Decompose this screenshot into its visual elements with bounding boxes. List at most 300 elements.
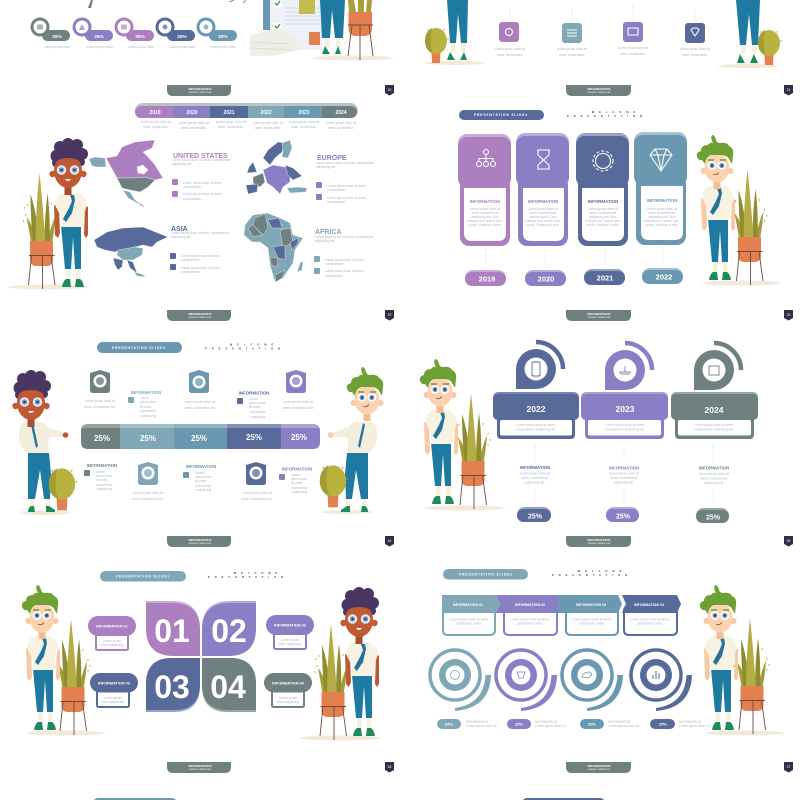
- panel: arrow boxes: INFORMATION 02: [515, 603, 545, 607]
- percent row: slide 27: Lorem ipsum dolor sit: [679, 724, 710, 728]
- footers and page numbers: BUSINESS COMPANY HERE: [189, 768, 212, 771]
- footers and page numbers: [167, 85, 793, 773]
- panel: card 2022: adipiscing elit. Duis: [648, 215, 676, 219]
- info and percent: 2023: [606, 466, 639, 522]
- badges: slide 24: Lorem ipsum dolor sit: [242, 491, 272, 495]
- panel: card 2022: [634, 132, 687, 245]
- year pills: slide 23: [465, 268, 683, 286]
- heading: slide 27: WELCOME: [578, 569, 626, 573]
- footers and page numbers: BUSINESS COMPANY HERE: [588, 91, 611, 94]
- icon: gear: [593, 151, 613, 171]
- info and percent: 2024: adipiscing elit.: [704, 481, 724, 485]
- text block: united states: Lorem ipsum dolor sit amet, consectetuer: [172, 158, 231, 162]
- text block: united states: [172, 153, 231, 201]
- label: information 01: dolor adipiscing: [101, 643, 123, 647]
- text block: africa: Lorem ipsum dolor sit amet,: [325, 269, 364, 273]
- character with cactus: slide 24 right: [320, 367, 384, 514]
- panel: card 2019: amet, consectetuer: [471, 211, 499, 215]
- panel: card 2019: adipiscing elit. Duis: [471, 215, 499, 219]
- percent row: slide 27: 25%: [515, 722, 523, 726]
- panel: arrow boxes: consectetur lorem.: [456, 622, 482, 626]
- percent row: slide 27: INFORMATION: [535, 720, 558, 724]
- information blocks: slide 24: r adipiscing: [96, 487, 112, 491]
- text block: africa: consectetuer.: [325, 262, 344, 266]
- text block: africa: AFRICA: [315, 229, 341, 236]
- panel: slide 22 timeline: amet, consectetur.: [255, 126, 281, 130]
- panel: year 2023: 2023: [616, 404, 635, 414]
- info and percent: 2022: Lorem ipsum dolor sit: [520, 472, 550, 476]
- footers and page numbers: 24: [388, 539, 391, 543]
- text block: africa: adipiscing elit.: [315, 239, 335, 243]
- info and percent: 2024: INFORMATION: [699, 466, 729, 470]
- year pills: slide 23: 2021: [597, 274, 613, 282]
- text block: europe: Lorem ipsum dolor sit amet,: [327, 196, 366, 200]
- information blocks: slide 24: INFORMATION: [186, 464, 216, 469]
- panel: slide 22 timeline: 2022: [260, 110, 272, 116]
- information blocks: slide 24: INFORMATION: [282, 466, 312, 472]
- character with plant: slide 25: [420, 359, 505, 510]
- panel: card 2020: Lorem ipsum dolor sit: [528, 207, 558, 211]
- footers and page numbers: INFOGRAPHICS: [188, 764, 212, 768]
- information blocks: slide 24: r adipiscing: [195, 488, 211, 492]
- panel: card 2021: amet, consectetuer: [589, 211, 617, 215]
- footers and page numbers: 20: [388, 88, 391, 92]
- text block: united states: UNITED STATES: [173, 153, 228, 160]
- panel: year 2023: Lorem ipsum dolor sit amet,: [605, 423, 645, 427]
- text block: asia: Lorem ipsum dolor sit amet,: [181, 266, 220, 270]
- text block: europe: consectetuer.: [327, 188, 346, 192]
- illustration: documents, legs and plant: [250, 0, 393, 60]
- label: information 04: [264, 673, 312, 708]
- year pills: slide 23: 2020: [538, 274, 554, 284]
- panel: year 2022: consectetuer adipiscing elit.: [516, 428, 556, 432]
- label: information 03: INFORMATION 03: [98, 682, 130, 686]
- info and percent: 2023: INFORMATION: [609, 466, 639, 470]
- information blocks: slide 24: consectetur: [291, 486, 308, 490]
- badges: slide 24: amet, consectetur elit.: [84, 405, 116, 409]
- chart: segmented percentage bar: 25%: [140, 434, 156, 443]
- panel: card 2020: tristique nec, auctor quis,: [525, 219, 561, 223]
- info and percent: 2024: 25%: [706, 514, 721, 522]
- panel: slide 21 icon row: amet, consectetur.: [559, 53, 585, 57]
- footers and page numbers: 21: [787, 88, 790, 92]
- year pills: slide 23: 2019: [479, 274, 495, 284]
- information blocks: slide 24: Lorem: [249, 397, 258, 401]
- panel: card 2020: adipiscing elit. Duis: [529, 215, 557, 219]
- info and percent: 2022: INFORMATION: [520, 465, 550, 470]
- panel: slide 22 timeline: 2020: [186, 110, 198, 116]
- information blocks: slide 24: Lorem: [140, 396, 149, 400]
- information blocks: slide 24: INFORMATION: [239, 390, 269, 396]
- label: information 02: dolor adipiscing: [279, 642, 301, 646]
- chart: segmented percentage bar: [81, 424, 320, 449]
- panel: slide 21 icon row: amet, consectetur.: [497, 53, 523, 57]
- footers and page numbers: 22: [388, 313, 391, 317]
- pill item blue: Lorem ipsum dolor: [210, 45, 237, 49]
- information blocks: slide 24: ipsum dolor: [249, 401, 266, 405]
- petal chart: 01 to 04: 01: [154, 613, 190, 649]
- footers and page numbers: INFOGRAPHICS: [188, 87, 212, 91]
- pill item blue: [196, 18, 237, 49]
- text block: africa: Lorem ipsum dolor sit amet, consectetuer: [315, 235, 374, 239]
- text block: europe: Lorem ipsum dolor sit amet,: [327, 184, 366, 188]
- panel: card 2021: Lorem ipsum dolor sit: [588, 207, 618, 211]
- info and percent: 2023: 25%: [616, 514, 631, 520]
- information blocks: slide 24: r adipiscing: [249, 415, 265, 419]
- text block: africa: consectetuer.: [325, 274, 344, 278]
- text block: asia: [170, 226, 230, 274]
- panel: card 2020: [516, 133, 569, 246]
- text block: asia: consectetuer.: [181, 270, 200, 274]
- panel: card 2019: Lorem ipsum dolor sit: [470, 207, 500, 211]
- panel: year 2024: [671, 343, 758, 439]
- panel: slide 22 timeline: 2021: [223, 110, 235, 116]
- info and percent: 2023: adipiscing elit.: [614, 480, 634, 484]
- character with plant: slide 26 right: [300, 587, 380, 740]
- text block: asia: Lorem ipsum dolor sit amet,: [181, 254, 220, 258]
- footers and page numbers: INFOGRAPHICS: [188, 312, 212, 316]
- percent row: slide 27: 25%: [445, 722, 453, 726]
- label: information 01: INFORMATION 01: [96, 624, 128, 628]
- info and percent: 2022: [517, 465, 551, 522]
- panel: card 2022: amet, consectetuer: [648, 211, 676, 215]
- percent row: slide 27: Lorem ipsum dolor sit: [608, 724, 639, 728]
- footers and page numbers: INFOGRAPHICS: [188, 538, 212, 542]
- panel: year 2024: 2024: [705, 405, 724, 415]
- information blocks: slide 24: ipsum dolor: [96, 474, 113, 478]
- panel: slide 21 icon row: Lorem ipsum dolor sit: [680, 47, 710, 51]
- panel: slide 22 timeline: amet, consectetur.: [291, 125, 317, 129]
- panel: slide 22 timeline: [135, 103, 358, 130]
- character with cactus: slide 24 left: [12, 370, 77, 515]
- footers and page numbers: INFOGRAPHICS: [587, 764, 611, 768]
- chart: segmented percentage bar: 25%: [291, 433, 307, 442]
- label: information 03: [90, 673, 138, 708]
- panel: slide 22 timeline: Lorem ipsum dolor sit: [253, 121, 283, 125]
- panel: slide 22 timeline: amet, consectetur.: [143, 125, 169, 129]
- chart: segmented percentage bar: 25%: [246, 433, 262, 442]
- footers and page numbers: BUSINESS COMPANY HERE: [189, 542, 212, 545]
- text block: africa: [314, 229, 374, 278]
- chart: segmented percentage bar: 25%: [94, 434, 110, 443]
- badges: slide 24: amet, consectetur elit.: [132, 497, 164, 501]
- panel: card 2021: adipiscing elit. Duis: [589, 215, 617, 219]
- illustration: slide 21 right legs and cactus: [718, 0, 782, 68]
- badges: slide 24: amet, consectetur elit.: [184, 406, 216, 410]
- text block: united states: consectetuer.: [183, 185, 202, 189]
- information blocks: slide 24: consectetur: [96, 483, 113, 487]
- panel: year 2024: consectetuer adipiscing elit.: [694, 428, 734, 432]
- text block: united states: consectetuer.: [183, 197, 202, 201]
- information blocks: slide 24: consectetur: [249, 410, 266, 414]
- label: information 04: INFORMATION 04: [272, 682, 305, 686]
- footers and page numbers: BUSINESS COMPANY HERE: [588, 542, 611, 545]
- label: information 03: Lorem ipsum: [104, 696, 123, 700]
- information blocks: slide 24: sit amet,: [291, 481, 303, 485]
- text block: united states: adipiscing elit.: [172, 162, 192, 166]
- heading: slide 26: PRESENTATION SLIDEs: [116, 574, 170, 578]
- illustration: slide 21 left legs and cactus: [425, 0, 485, 65]
- panel: arrow boxes: consectetur lorem.: [579, 622, 605, 626]
- panel: slide 22 timeline: Lorem ipsum dolor sit: [289, 120, 319, 124]
- panel: arrow boxes: INFORMATION 01: [453, 603, 483, 607]
- information blocks: slide 24: ipsum dolor: [140, 400, 157, 404]
- panel: slide 22 timeline: amet, consectetur.: [181, 126, 207, 130]
- character with plant: slide 23: [697, 135, 780, 286]
- panel: year 2022: 2022: [527, 404, 546, 414]
- badges: slide 24: amet, consectetur elit.: [282, 406, 314, 410]
- heading: slide 26: WELCOME: [234, 571, 282, 575]
- heading: slide 24: PRESENTATION: [205, 346, 285, 350]
- heading: slide 23: [459, 110, 647, 120]
- panel: card 2021: [576, 133, 629, 246]
- panel: arrow boxes: Lorem ipsum dolor sit amet,: [449, 618, 489, 622]
- panel: arrow boxes: [442, 595, 681, 636]
- panel: card 2019: INFORMATION: [470, 199, 500, 204]
- percent row: slide 27: Lorem ipsum dolor sit: [466, 724, 497, 728]
- heading: slide 24: PRESENTATION SLIDEs: [112, 346, 166, 350]
- percent row: slide 27: INFORMATION: [679, 720, 702, 724]
- map: europe: [246, 140, 307, 194]
- heading: slide 26: PRESENTATION: [208, 575, 288, 579]
- radial icon 1: [430, 650, 491, 711]
- panel: arrow boxes: consectetur lorem.: [637, 622, 663, 626]
- pill item violet: 25%: [135, 34, 146, 40]
- badges: slide 24: Lorem ipsum dolor sit: [133, 491, 163, 495]
- badges: slide 24: Lorem ipsum dolor sit: [185, 400, 215, 404]
- next slide pill tops: [93, 798, 605, 800]
- panel: card 2019: [458, 134, 511, 246]
- pill item purple: Lorem ipsum dolor: [87, 45, 114, 49]
- panel: slide 22 timeline: amet, consectetur.: [218, 125, 244, 129]
- information blocks: slide 24: r adipiscing: [291, 490, 307, 494]
- panel: year 2023: consectetuer adipiscing elit.: [605, 428, 645, 432]
- text block: europe: Lorem ipsum dolor sit amet, consectetuer: [316, 161, 375, 165]
- heading: slide 27: PRESENTATION SLIDEs: [459, 572, 513, 576]
- info and percent: 2024: Lorem ipsum dolor sit: [699, 472, 729, 476]
- footers and page numbers: 25: [787, 539, 790, 543]
- heading: slide 23: WELCOME: [592, 110, 640, 114]
- footers and page numbers: INFOGRAPHICS: [587, 87, 611, 91]
- panel: arrow boxes: Lorem ipsum dolor sit amet,: [630, 618, 670, 622]
- panel: arrow boxes: INFORMATION 03: [576, 603, 606, 607]
- pill item violet: [114, 18, 155, 49]
- information blocks: slide 24: ipsum dolor: [291, 477, 308, 481]
- info and percent: 2023: Lorem ipsum dolor sit: [609, 472, 639, 476]
- percent row: slide 27: 25%: [588, 722, 596, 726]
- heading: slide 26: [100, 571, 288, 582]
- icon: diamond: [650, 149, 672, 171]
- information blocks: slide 24: sit amet,: [195, 479, 207, 483]
- pill item gray: 25%: [52, 34, 63, 40]
- text block: asia: adipiscing elit.: [171, 235, 191, 239]
- panel: year 2022: Lorem ipsum dolor sit amet,: [516, 423, 556, 427]
- footers and page numbers: BUSINESS COMPANY HERE: [189, 316, 212, 319]
- information blocks: slide 24: ipsum dolor: [195, 475, 212, 479]
- panel: card 2020: purus. Vivamus id sem.: [526, 223, 560, 227]
- footers and page numbers: 23: [787, 313, 790, 317]
- information blocks: slide 24: consectetur: [140, 409, 157, 413]
- label: information 01: Lorem ipsum: [103, 639, 122, 643]
- heading: slide 24: [97, 342, 285, 353]
- heading: slide 23: PRESENTATION SLIDEs: [474, 113, 528, 117]
- information blocks: slide 24: [84, 390, 312, 494]
- heading: slide 27: [443, 569, 632, 580]
- panel: slide 22 timeline: amet, consectetur.: [328, 126, 354, 130]
- character with plant: slide 22: [8, 138, 88, 290]
- pill item blue: 25%: [218, 34, 229, 40]
- badges: slide 24: Lorem ipsum dolor sit: [283, 400, 313, 404]
- icon: diamond: [685, 23, 705, 43]
- chart: segmented percentage bar: 25%: [191, 434, 207, 443]
- info and percent: 2023: amet, consectetuer: [610, 476, 638, 480]
- icon: folder: [623, 22, 643, 42]
- panel: slide 22 timeline: Lorem ipsum dolor sit: [216, 120, 246, 124]
- text block: africa: Lorem ipsum dolor sit amet,: [325, 258, 364, 262]
- badges: slide 24: Lorem ipsum dolor sit: [85, 399, 115, 403]
- label: information 03: dolor adipiscing: [102, 700, 124, 704]
- information blocks: slide 24: Lorem: [195, 471, 204, 475]
- panel: arrow boxes: consectetur lorem.: [517, 622, 543, 626]
- icon: hierarchy: [476, 150, 496, 166]
- info and percent: 2022: 25%: [528, 514, 543, 520]
- panel: slide 20 percent row: [30, 0, 246, 49]
- pill item gray: [30, 18, 71, 49]
- panel: arrow boxes: Lorem ipsum dolor sit amet,: [572, 618, 612, 622]
- panel: card 2020: INFORMATION: [528, 199, 558, 204]
- panel: slide 22 timeline: 2023: [298, 110, 310, 116]
- heading: slide 23: PRESENTATION: [567, 114, 647, 118]
- panel: slide 21 icon row: Lorem ipsum dolor sit: [618, 46, 648, 50]
- panel: year 2022: [493, 342, 579, 439]
- petal chart: 01 to 04: 02: [211, 613, 247, 649]
- panel: card 2021: tristique nec, auctor quis,: [585, 219, 621, 223]
- panel: slide 22 timeline: 2019: [149, 110, 161, 116]
- info and percent: 2024: [696, 466, 729, 523]
- information blocks: slide 24: r adipiscing: [140, 414, 156, 418]
- panel: card 2019: purus. Vivamus id sem.: [468, 223, 502, 227]
- text block: asia: consectetuer.: [181, 258, 200, 262]
- info and percent: 2022: amet, consectetuer: [521, 476, 549, 480]
- percent row: slide 27: INFORMATION: [608, 720, 631, 724]
- information blocks: slide 24: Lorem: [291, 473, 300, 477]
- information blocks: slide 24: sit amet,: [96, 478, 108, 482]
- petal chart: 01 to 04: [146, 601, 256, 712]
- information blocks: slide 24: Lorem: [96, 470, 105, 474]
- footers and page numbers: 27: [787, 765, 790, 769]
- petal chart: 01 to 04: 03: [154, 669, 190, 705]
- information blocks: slide 24: consectetur: [195, 484, 212, 488]
- panel: slide 21 icon row: amet, consectetur.: [682, 53, 708, 57]
- text block: europe: EUROPE: [317, 155, 347, 162]
- map: asia: [94, 227, 168, 277]
- panel: slide 21 icon row: amet, consectetur.: [620, 52, 646, 56]
- character with plant: slide 26 left: [22, 585, 105, 736]
- footers and page numbers: BUSINESS COMPANY HERE: [588, 768, 611, 771]
- heading: slide 27: PRESENTATION: [552, 573, 632, 577]
- information blocks: slide 24: INFORMATION: [131, 390, 161, 395]
- panel: year 2024: Lorem ipsum dolor sit amet,: [694, 423, 734, 427]
- panel: slide 21 icon row: Lorem ipsum dolor sit: [495, 47, 525, 51]
- percent row: slide 27: Lorem ipsum dolor sit: [535, 724, 566, 728]
- panel: card 2020: amet, consectetuer: [529, 211, 557, 215]
- character with plant: slide 27: [700, 585, 784, 736]
- pill item purple: 25%: [94, 34, 105, 40]
- label: information 04: dolor adipiscing: [277, 700, 299, 704]
- panel: slide 21 icon row: Lorem ipsum dolor sit: [557, 47, 587, 51]
- icon: hourglass: [537, 150, 550, 169]
- radial icon 2: [496, 650, 557, 711]
- panel: slide 22 timeline: Lorem ipsum dolor sit: [326, 121, 356, 125]
- label: information 02: Lorem ipsum: [281, 638, 300, 642]
- footers and page numbers: BUSINESS COMPANY HERE: [189, 91, 212, 94]
- information blocks: slide 24: sit amet,: [249, 405, 261, 409]
- map: africa: [244, 213, 303, 282]
- percent row: slide 27: INFORMATION: [466, 720, 489, 724]
- pill item navy: Lorem ipsum dolor: [169, 45, 196, 49]
- badges: slide 24: [84, 370, 314, 501]
- text block: asia: ASIA: [171, 226, 188, 233]
- panel: card 2021: purus. Vivamus id sem.: [586, 223, 620, 227]
- pill item navy: [156, 18, 196, 49]
- panel: card 2019: tristique nec, auctor quis,: [467, 219, 503, 223]
- icon: gear: [499, 22, 519, 42]
- information blocks: slide 24: sit amet,: [140, 405, 152, 409]
- radial icon 4: [631, 650, 692, 711]
- label: information 02: [266, 615, 314, 650]
- percent row: slide 27: 25%: [659, 722, 667, 726]
- panel: arrow boxes: Lorem ipsum dolor sit amet,: [510, 618, 550, 622]
- footers and page numbers: 26: [388, 765, 391, 769]
- icon: sliders: [562, 23, 582, 43]
- text block: asia: Lorem ipsum dolor sit amet, consectetuer: [171, 231, 230, 235]
- footers and page numbers: BUSINESS COMPANY HERE: [588, 316, 611, 319]
- label: information 01: [88, 616, 136, 651]
- info and percent: 2022: adipiscing elit.: [525, 480, 545, 484]
- text block: united states: Lorem ipsum dolor sit amet,: [183, 192, 222, 196]
- panel: slide 22 timeline: Lorem ipsum dolor sit: [179, 121, 209, 125]
- panel: arrow boxes: INFORMATION 04: [634, 603, 664, 607]
- badges: slide 24: amet, consectetur elit.: [241, 497, 273, 501]
- text block: europe: [316, 155, 375, 204]
- year pills: slide 23: 2022: [656, 272, 672, 282]
- map: north america: [89, 140, 163, 207]
- pill item gray: Lorem ipsum dolor: [44, 45, 71, 49]
- text block: united states: Lorem ipsum dolor sit amet,: [183, 181, 222, 185]
- information blocks: slide 24: INFORMATION: [87, 463, 117, 468]
- panel: year 2023: [581, 343, 668, 439]
- pill item navy: 25%: [177, 34, 188, 40]
- panel: slide 22 timeline: 2024: [335, 110, 347, 116]
- footers and page numbers: INFOGRAPHICS: [587, 538, 611, 542]
- text block: europe: adipiscing elit.: [316, 165, 336, 169]
- footers and page numbers: INFOGRAPHICS: [587, 312, 611, 316]
- info and percent: 2024: amet, consectetuer: [700, 476, 728, 480]
- panel: slide 22 timeline: Lorem ipsum dolor sit: [141, 120, 171, 124]
- text block: europe: consectetuer.: [327, 200, 346, 204]
- panel: card 2022: Lorem ipsum dolor sit: [647, 207, 677, 211]
- label: information 04: Lorem ipsum: [279, 696, 298, 700]
- heading: slide 24: WELCOME: [230, 342, 278, 346]
- petal chart: 01 to 04: 04: [210, 669, 246, 705]
- radial icon 3: [562, 650, 623, 711]
- pill item violet: Lorem ipsum dolor: [128, 45, 155, 49]
- panel: slide 21 icon row: [495, 5, 710, 57]
- percent row: slide 27: [437, 719, 710, 729]
- label: information 02: INFORMATION 02: [274, 624, 306, 628]
- panel: card 2022: tristique nec, auctor quis,: [644, 219, 680, 223]
- pill item purple: [72, 18, 114, 49]
